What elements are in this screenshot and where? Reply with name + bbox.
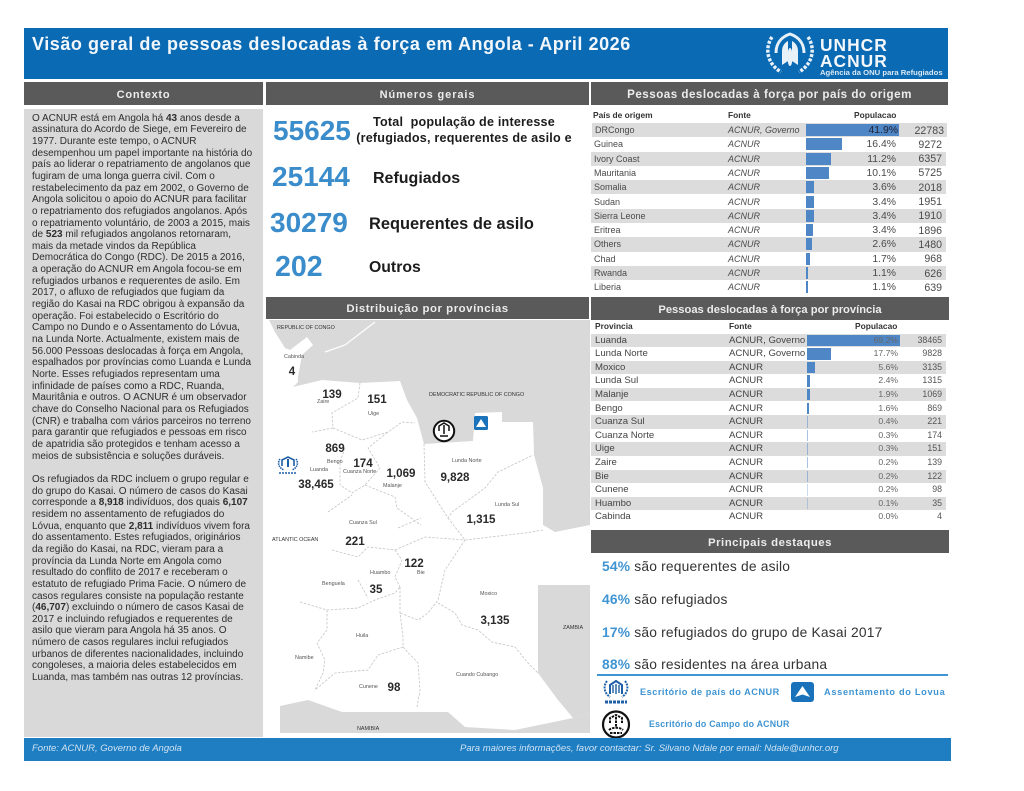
highlight: Kasai: 17% são refugiados do grupo de Kasai 2017	[602, 625, 883, 640]
map labels: province populations: 4	[289, 365, 296, 378]
column headers	[595, 321, 898, 331]
row: Uige: 151	[927, 443, 942, 453]
row: Moxico: ACNUR	[729, 362, 763, 373]
map labels: province populations: 221	[345, 535, 365, 548]
row: Rwanda: ACNUR	[728, 268, 760, 278]
map labels: places: ZAMBIA	[563, 625, 583, 631]
map labels: province populations: 1,315	[466, 513, 496, 526]
row: Chad	[594, 253, 942, 265]
row: Bie: Bie	[595, 470, 609, 482]
row: Malanje: 1.9%	[878, 389, 898, 399]
row: Eritrea: Eritrea	[594, 225, 621, 235]
icon: field office on map	[434, 421, 454, 441]
row: Luanda: 69.2%	[874, 334, 898, 344]
row: Sierra Leone: 1910	[918, 210, 942, 222]
text block: context: O ACNUR está em Angola há 43 anos desde a assinatura do Acordo de Siege, em Fevereiro de 1977. Durante este tempo, o ACNUR desempenhou um papel importante na história do país ao liderar o repatriamento de angolanos que fugiram de uma longa guerra civil. Com o restabelecimento da paz em 2002, o Governo de Angola solicitou o apoio do ACNUR para facilitar o repatriamento dos refugiados angolanos. Após o repatriamento voluntário, de 2003 a 2015, mais de 523 mil refugiados angolanos retornaram, mais da metade vindos da República Democrática do Congo (RDC). De 2015 a 2016, a operação do ACNUR em Angola focou-se em refugiados urbanos e requerentes de asilo. Em 2017, o afluxo de refugiados que fugiam da região do Kasai na RDC obrigou à expansão da operação. Foi estabelecido o Escritório do Campo no Dundo e o Assentamento do Lóvua, na Lunda Norte. Actualmente, existem mais de 56.000 Pessoas deslocadas à força em Angola, espalhados por províncias como Luanda e Lunda Norte. Esses refugiados representam uma infinidade de países como a RDC, Ruanda, Mauritânia e outros. O ACNUR é um observador chave do Conselho Nacional para os Refugiados (CNR) e trabalha com vários parceiros no terreno para garantir que refugiados e pessoas em risco de apatridia são protegidos e tenham acesso a meios de subsistência e soluções duráveis. Os refugiados da RDC incluem o grupo regular e do grupo do Kasai. O número de casos do Kasai corresponde a 8,918 indivíduos, dos quais 6,107 residem no assentamento de refugiados do Lóvua, enquanto que 2,811 indivíduos vivem fora do assentamento. Estes refugiados, originários da região do Kasai, na RDC, vieram para a província da Lunda Norte em Angola como resultado do conflito de 2017 e receberam o estatuto de refugiado Prima Facie. O número de casos regulares consiste na população restante (46,707) excluindo o número de casos Kasai de 2017 e incluindo refugiados e requerentes de asilo que vieram para Angola há 35 anos. O número de casos regulares inclui refugiados urbanos de diferentes nacionalidades, incluindo congoleses, a maioria deles estabelecidos em Luanda, mas também nas outras 12 províncias.	[32, 113, 252, 683]
row: Malanje: 1069	[922, 389, 942, 399]
row: Somalia: 3.6%	[872, 182, 896, 193]
map labels: places: Lunda Norte	[452, 458, 482, 464]
row: Rwanda: Rwanda	[594, 268, 627, 278]
icon: UNHCR country office on map	[279, 457, 297, 473]
heading: Números gerais	[266, 82, 589, 105]
legend	[597, 674, 948, 738]
heading: Distribuição por províncias	[266, 297, 589, 319]
row: Eritrea: 3.4%	[872, 225, 896, 236]
row: Chad: Chad	[594, 254, 616, 264]
row: Guinea: Guinea	[594, 139, 623, 149]
row: Eritrea: 1896	[918, 225, 942, 237]
row: Others: ACNUR	[728, 239, 760, 249]
row: Bengo	[595, 402, 942, 414]
row: Cuanza Norte	[595, 430, 942, 441]
row: Cunene: Cunene	[595, 484, 629, 495]
row: Malanje: ACNUR	[729, 389, 763, 400]
figure: total: 55625	[273, 115, 351, 146]
row: Bie: 0.2%	[878, 470, 898, 480]
panel: key figures	[270, 115, 572, 283]
row: Sudan: 3.4%	[872, 196, 896, 208]
row: Liberia: 1.1%	[872, 282, 896, 293]
row: Guinea: 16.4%	[867, 139, 896, 150]
row: Moxico: 5.6%	[878, 362, 898, 372]
row: Liberia: Liberia	[594, 282, 621, 292]
row: Sudan	[594, 196, 942, 208]
map labels: places: Moxico	[480, 591, 497, 597]
row: Liberia: 639	[924, 282, 942, 294]
icon: UNHCR emblem	[766, 32, 814, 74]
map labels: places: Cuando Cubango	[456, 672, 498, 678]
row: Bengo: 869	[927, 402, 942, 412]
map labels: places: Zaire	[317, 399, 329, 405]
row: Cuanza Sul: Cuanza Sul	[595, 416, 645, 427]
map labels: places: Lunda Sul	[495, 502, 519, 508]
column headers	[593, 110, 896, 120]
icon: field office	[602, 710, 630, 738]
highlights list	[602, 559, 883, 672]
row: Uige	[591, 442, 946, 456]
row: Huambo	[591, 497, 946, 510]
title banner	[24, 28, 948, 79]
row: Cuanza Sul: 0.4%	[878, 416, 898, 426]
legend rule	[597, 674, 948, 676]
heading: Números gerais: Números gerais	[380, 89, 475, 101]
icon: settlement tent	[791, 682, 814, 702]
row: Cuanza Norte: 0.3%	[878, 430, 898, 440]
row: Guinea: 9272	[918, 139, 942, 151]
row: Rwanda	[591, 266, 946, 280]
row: Cuanza Sul: 221	[927, 416, 942, 426]
map labels: places: Benguela	[322, 581, 345, 587]
legend label: country office: Escritório de país do ACNUR	[640, 687, 780, 697]
map labels: province populations: 38,465	[298, 478, 334, 491]
row: Sierra Leone: 3.4%	[872, 211, 896, 222]
row: DR Congo: 41.9%	[869, 125, 898, 136]
row: Mauritania: 10.1%	[867, 168, 896, 179]
row: DR Congo: ACNUR, Governo	[728, 125, 800, 135]
row: Ivory Coast	[591, 152, 946, 166]
row: Uige: 0.3%	[878, 443, 898, 453]
row: Cunene	[595, 484, 942, 496]
map labels: places: Malanje	[383, 483, 402, 489]
map labels: places: REPUBLIC OF CONGO	[277, 325, 335, 331]
row: Guinea: ACNUR	[728, 139, 760, 149]
map labels: province populations: 98	[388, 681, 401, 694]
heading: Pessoas deslocadas por província: Pessoas deslocadas à força por província	[658, 304, 882, 316]
heading: Pessoas deslocadas por país de origem: Pessoas deslocadas à força por país do origem	[627, 88, 912, 101]
highlight: urban: 88% são residentes na área urbana	[602, 657, 827, 672]
row: Huambo: ACNUR	[729, 498, 763, 509]
map labels: places: Cuanza Sul	[349, 520, 377, 526]
row: Luanda	[591, 334, 946, 347]
map labels: places: Luanda	[310, 467, 328, 473]
row: DR Congo: 22783	[915, 124, 944, 136]
row: Huambo: 35	[932, 498, 942, 508]
map labels: province populations	[289, 365, 510, 694]
row: Lunda Norte: ACNUR, Governo	[729, 348, 805, 359]
row: Bie	[591, 470, 946, 483]
table: by country of origin	[591, 110, 947, 294]
row: Eritrea: ACNUR	[728, 225, 760, 235]
row: Sudan: ACNUR	[728, 196, 760, 206]
legend label: field office: Escritório do Campo do ACNUR	[649, 719, 790, 729]
map labels: province populations: 174	[353, 457, 373, 470]
row: Others: Others	[594, 239, 621, 249]
row: Ivory Coast: 6357	[918, 153, 942, 165]
figure: others: 202	[275, 251, 323, 283]
legend label: settlement: Assentamento do Lovua	[824, 687, 945, 697]
map labels: places: DEMOCRATIC REPUBLIC OF CONGO	[429, 392, 524, 398]
row: Lunda Norte: 17.7%	[874, 348, 898, 358]
row: Mauritania	[594, 167, 942, 179]
label: others: Outros	[369, 259, 421, 276]
row: Luanda: ACNUR, Governo	[729, 334, 805, 346]
heading: Principais destaques	[591, 530, 949, 553]
table: by province	[591, 321, 946, 522]
map labels: province populations: 151	[367, 393, 387, 406]
heading: Contexto: Contexto	[117, 89, 170, 101]
row: Cunene: 98	[932, 484, 942, 494]
row: Cuanza Sul: ACNUR	[729, 416, 763, 427]
map labels: places: Cuanza Norte	[343, 469, 376, 475]
row: Lunda Sul: 2.4%	[878, 375, 898, 385]
row: Others: 1480	[918, 239, 942, 251]
map labels: province populations: 3,135	[480, 614, 510, 627]
label: total: Total população de interesse (refugiados, requerentes de asilo e	[356, 115, 572, 145]
row: Rwanda: 626	[924, 268, 942, 280]
label: refugees: Refugiados	[373, 170, 460, 187]
highlight: asylum seekers: 54% são requerentes de asilo	[602, 559, 790, 574]
row: Others: 2.6%	[872, 239, 896, 250]
row: Moxico: Moxico	[595, 362, 625, 373]
map labels: places: Cunene	[359, 684, 378, 690]
row: Lunda Norte: 9828	[922, 348, 942, 358]
icon: UNHCR country office	[604, 680, 628, 704]
row: Cabinda: 4	[937, 511, 942, 521]
row: Bengo: ACNUR	[729, 402, 763, 414]
row: Cuanza Norte: ACNUR	[729, 430, 763, 441]
column headers: Populacao	[855, 321, 897, 331]
row: Others	[591, 237, 946, 252]
heading: Contexto	[24, 82, 263, 105]
heading: Pessoas deslocadas por país de origem	[591, 82, 948, 105]
map labels: places: Cabinda	[284, 354, 304, 360]
row: Huambo: Huambo	[595, 498, 631, 509]
map labels: places: Huambo	[370, 570, 390, 576]
row: Liberia	[594, 281, 942, 294]
row: Guinea	[594, 138, 942, 151]
column headers: País de origem	[593, 110, 653, 120]
row: Cabinda: Cabinda	[595, 511, 631, 522]
column headers: Fonte	[729, 321, 752, 331]
column headers: Populacao	[854, 110, 896, 120]
row: Rwanda: 1.1%	[872, 268, 896, 279]
row: Uige: ACNUR	[729, 443, 763, 454]
title: Visão geral de pessoas deslocadas à força em Angola - April 2026	[32, 34, 631, 54]
map labels: places: ATLANTIC OCEAN	[272, 537, 318, 543]
row: Somalia: Somalia	[594, 182, 627, 192]
map labels: places: Bengo	[327, 459, 343, 465]
row: Sierra Leone: Sierra Leone	[594, 211, 646, 221]
label: asylum seekers: Requerentes de asilo	[369, 215, 534, 233]
footer contact: Para maiores informações, favor contactar: Sr. Silvano Ndale por email: Ndale@unhcr.org	[460, 743, 839, 754]
row: Cuanza Norte: Cuanza Norte	[595, 430, 654, 441]
footer	[24, 738, 951, 761]
row: Lunda Norte: Lunda Norte	[595, 348, 648, 359]
row: DR Congo	[592, 123, 947, 137]
map labels: places: Namibe	[295, 655, 314, 661]
row: Cabinda: 0.0%	[878, 511, 898, 521]
row: Cabinda: ACNUR	[729, 511, 763, 522]
row: Ivory Coast: 11.2%	[867, 154, 896, 165]
map labels: province populations: 9,828	[440, 471, 470, 484]
row: Somalia: ACNUR	[728, 182, 760, 192]
map labels: province populations: 122	[404, 557, 424, 570]
row: Huambo: 0.1%	[878, 498, 898, 508]
row: Lunda Sul: 1315	[922, 375, 942, 385]
row: Uige: Uige	[595, 443, 615, 454]
row: Moxico	[591, 361, 946, 374]
row: Luanda: 38465	[918, 334, 942, 344]
map labels: province populations: 139	[322, 388, 342, 401]
row: Zaire: 0.2%	[878, 457, 898, 467]
map labels: province populations: 1,069	[386, 467, 416, 480]
panel: context text	[24, 109, 263, 737]
row: Cuanza Sul	[591, 415, 946, 429]
icon: settlement tent on map	[474, 416, 488, 430]
map labels: province populations: 35	[370, 583, 383, 596]
row: Sudan: Sudan	[594, 196, 620, 206]
row: Bie: ACNUR	[729, 470, 763, 482]
logo wordmark: UNHCR ACNUR	[820, 35, 888, 70]
map labels: places	[272, 325, 583, 732]
row: Somalia	[591, 180, 946, 194]
logo tagline: Agência da ONU para Refugiados	[820, 68, 943, 77]
row: Chad: 1.7%	[872, 254, 896, 265]
heading: Distribuição por províncias: Distribuição por províncias	[346, 303, 509, 315]
row: Cunene: 0.2%	[878, 484, 898, 494]
row: Malanje: Malanje	[595, 389, 629, 400]
row: Sierra Leone: ACNUR	[728, 211, 760, 221]
row: Lunda Sul: ACNUR	[729, 375, 763, 386]
row: Liberia: ACNUR	[728, 282, 760, 292]
UNHCR logo	[766, 32, 943, 77]
row: Lunda Sul	[595, 375, 942, 387]
figure: refugees: 25144	[272, 161, 350, 192]
map labels: places: Bie	[417, 570, 425, 576]
map labels: places: Huila	[356, 633, 368, 639]
row: Chad: 968	[924, 253, 942, 265]
figure: asylum seekers: 30279	[270, 207, 348, 238]
row: Moxico: 3135	[922, 362, 942, 372]
row: Somalia: 2018	[918, 182, 942, 194]
map labels: province populations: 869	[325, 442, 345, 455]
heading: Principais destaques: Principais destaques	[708, 537, 832, 549]
row: Bengo: 1.6%	[878, 402, 898, 412]
row: Bengo: Bengo	[595, 402, 623, 414]
row: Lunda Norte	[595, 348, 942, 360]
column headers: Provincia	[595, 321, 633, 331]
row: Cuanza Norte: 174	[927, 430, 942, 440]
row: Sudan: 1951	[918, 196, 942, 208]
column headers: Fonte	[728, 110, 751, 120]
row: Sierra Leone	[591, 209, 946, 223]
row: DR Congo: DRCongo	[595, 125, 635, 135]
heading: Pessoas deslocadas por província	[591, 297, 949, 320]
row: Zaire: ACNUR	[729, 457, 763, 468]
row: Cunene: ACNUR	[729, 484, 763, 495]
row: Bie: 122	[927, 470, 942, 480]
row: Lunda Sul: Lunda Sul	[595, 375, 638, 386]
row: Malanje	[591, 388, 946, 401]
row: Ivory Coast: Ivory Coast	[594, 154, 640, 164]
row: Mauritania: Mauritania	[594, 168, 636, 178]
row: Zaire: 139	[927, 457, 942, 467]
row: Zaire: Zaire	[595, 457, 617, 468]
row: Zaire	[595, 457, 942, 468]
row: Mauritania: 5725	[918, 167, 942, 179]
highlight: refugees: 46% são refugiados	[602, 592, 728, 607]
map labels: places: Uige	[368, 411, 379, 417]
row: Cabinda	[595, 511, 942, 522]
row: Mauritania: ACNUR	[728, 168, 760, 178]
row: Luanda: Luanda	[595, 334, 627, 346]
row: Ivory Coast: ACNUR	[728, 154, 760, 164]
row: Eritrea	[594, 224, 942, 237]
footer source: Fonte: ACNUR, Governo de Angola	[32, 743, 182, 754]
row: Chad: ACNUR	[728, 254, 760, 264]
map labels: places: NAMIBIA	[357, 726, 380, 732]
